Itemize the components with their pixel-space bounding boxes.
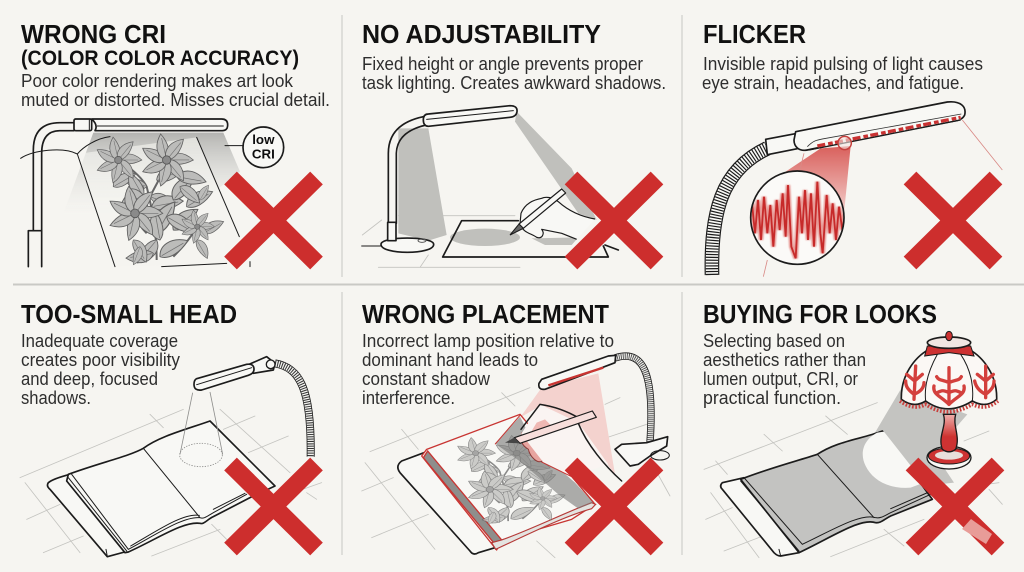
description: eye strain, headaches, and fatigue. (702, 73, 964, 93)
shade rim (925, 346, 974, 356)
description: lumen output, CRI, or (703, 369, 858, 389)
description: Inadequate coverage (21, 331, 178, 351)
small lamp beam (180, 392, 223, 467)
heading: wrong placement: WRONG PLACEMENT (362, 299, 609, 329)
gooseneck (275, 363, 311, 457)
heading: too-small head: TOO-SMALL HEAD (21, 299, 237, 329)
low CRI badge: CRI (252, 147, 275, 162)
light cone (63, 133, 240, 213)
magnified waveform (749, 171, 846, 264)
description: dominant hand leads to (362, 350, 538, 370)
description: Fixed height or angle prevents proper (362, 54, 643, 74)
description: practical function. (703, 388, 841, 408)
heading: no adjustability: NO ADJUSTABILITY (362, 19, 601, 49)
lampshade (901, 349, 997, 409)
ribbed gooseneck (712, 148, 767, 275)
desk lamp (362, 106, 517, 252)
description: interference. (362, 388, 455, 408)
desk lamp (28, 119, 228, 267)
lamp head (766, 102, 965, 155)
desk grid (20, 409, 322, 556)
red X (912, 464, 998, 549)
hand holding pen (510, 189, 595, 239)
description: shadows. (21, 388, 91, 408)
panel: too-small head (20, 299, 322, 557)
paper sheet (21, 137, 250, 267)
table lamp (900, 331, 998, 469)
floral drawing (455, 435, 567, 526)
lamp base and stem (927, 414, 971, 469)
illustration: hand shadow from misplaced lamp (362, 355, 670, 558)
thin red rays (763, 120, 1002, 277)
red light cone (520, 373, 615, 474)
red light cone (786, 146, 851, 213)
description (702, 54, 983, 93)
illustration: decorative lamp over book (704, 331, 1002, 558)
illustration: lamp over artwork (21, 119, 284, 268)
red X (571, 464, 657, 549)
desk grid (362, 388, 670, 558)
illustration: fixed lamp and drawing hand (362, 106, 618, 267)
shadows (398, 112, 597, 246)
description: Invisible rapid pulsing of light causes (703, 54, 983, 74)
panel: no adjustability (362, 19, 666, 267)
red X (571, 178, 657, 263)
open book (47, 421, 275, 557)
panel: buying for looks (703, 299, 1002, 558)
description: Selecting based on (703, 331, 845, 351)
description: Incorrect lamp position relative to (362, 331, 614, 351)
heading: wrong CRI: WRONG CRI (21, 19, 166, 49)
small lamp head (194, 357, 275, 390)
panel: flicker (702, 19, 1002, 277)
clamp lamp (539, 355, 669, 466)
description: Poor color rendering makes art look (21, 71, 294, 91)
desk lines (362, 216, 520, 267)
floral drawing (95, 133, 226, 268)
description: muted or distorted. Misses crucial detail. (21, 90, 330, 110)
description (362, 331, 614, 408)
red X (230, 464, 316, 549)
description: constant shadow (362, 369, 491, 389)
description: and deep, focused (21, 369, 158, 389)
gray shadow (874, 389, 967, 486)
desk grid (704, 403, 1002, 558)
description (21, 71, 330, 110)
panel: wrong placement (362, 299, 670, 558)
shade ornaments (906, 366, 994, 404)
illustration: small lamp over open book (20, 357, 322, 557)
description (21, 331, 180, 408)
description: creates poor visibility (21, 350, 180, 370)
low CRI badge (225, 127, 284, 168)
description: aesthetics rather than (703, 350, 866, 370)
hand shadow (495, 417, 593, 509)
glare on X (962, 519, 992, 544)
heading: buying for looks: BUYING FOR LOOKS (703, 299, 937, 329)
illustration: flickering lamp (712, 102, 1002, 277)
open book (721, 431, 932, 556)
hand with pencil (505, 404, 622, 481)
red X (910, 178, 996, 263)
panel: wrong CRI (21, 19, 330, 268)
description: task lighting. Creates awkward shadows. (362, 73, 666, 93)
low CRI badge: low (252, 132, 275, 147)
description (703, 331, 866, 408)
subheading: color accuracy: (COLOR COLOR ACCURACY) (21, 47, 299, 70)
heading: flicker: FLICKER (703, 19, 806, 49)
sketchbook (398, 414, 596, 554)
paper sheet (443, 221, 618, 257)
description (362, 54, 666, 93)
red shadow outline (495, 415, 594, 503)
red X (230, 178, 316, 263)
